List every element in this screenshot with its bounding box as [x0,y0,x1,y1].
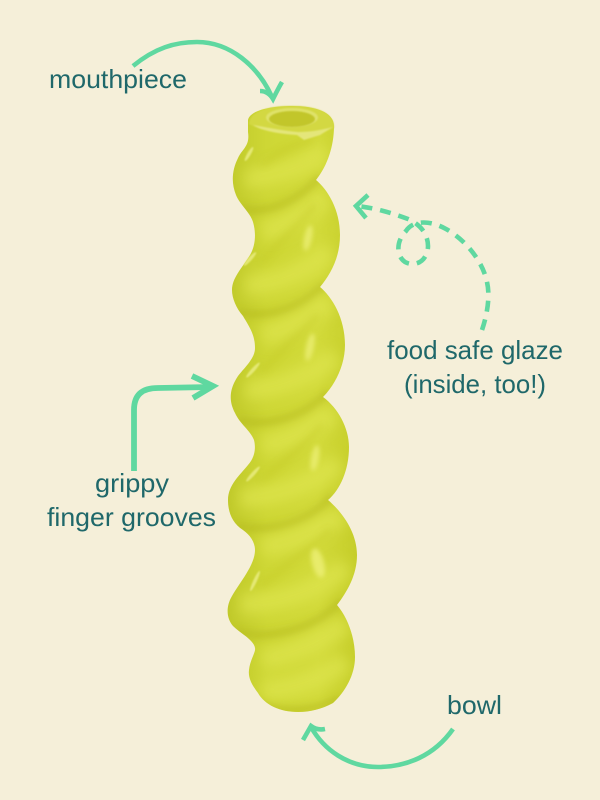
label: finger grooves: finger grooves [47,502,216,532]
ceramic twisted pipe [228,106,357,712]
label: grippy: grippy [95,468,169,498]
arrow: to mouthpiece [133,42,282,99]
twist shading [236,140,345,710]
label: mouthpiece: mouthpiece [49,64,187,94]
rim lip [249,106,334,132]
infographic canvas [47,40,562,770]
label: inside too: (inside, too!) [404,369,546,399]
mouthpiece rim [249,106,334,140]
rim hole [269,111,315,127]
pipe body [228,106,357,712]
specular highlights [301,224,328,579]
label: food safe glaze: food safe glaze [387,335,563,365]
arrow: to bowl [303,726,453,767]
left-edge glints [243,146,261,592]
label: bowl: bowl [447,690,502,720]
rim opening [266,108,318,127]
arrow: dashed to glaze [356,195,488,330]
rim glint [253,125,333,140]
arrow: to finger grooves [134,376,213,471]
